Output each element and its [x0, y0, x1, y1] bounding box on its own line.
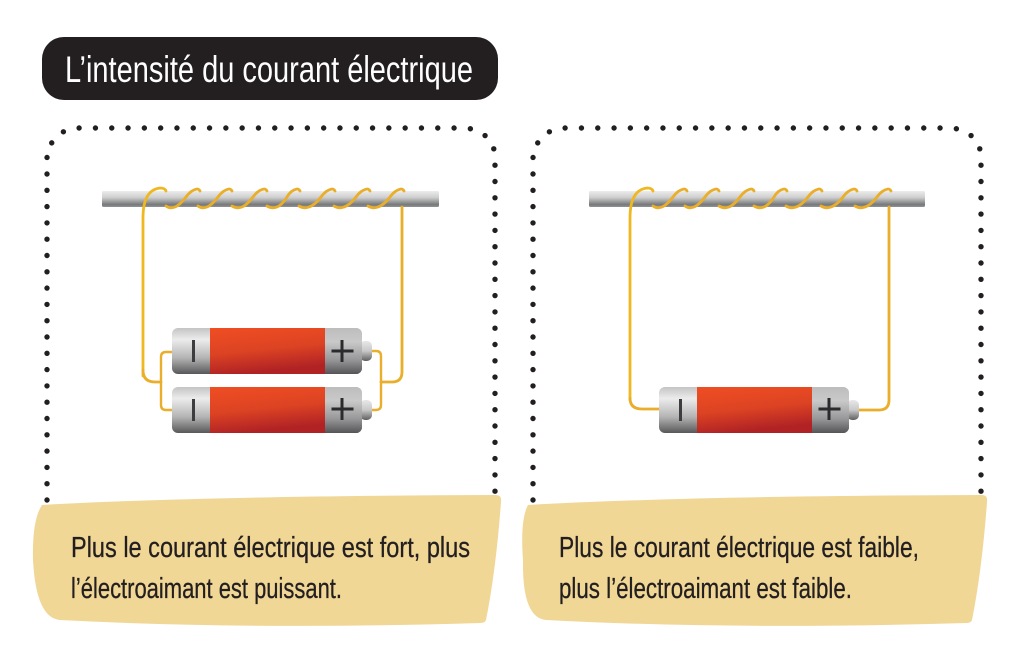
dotted frame — [47, 128, 495, 525]
panel: weak current — [522, 128, 987, 626]
copper coil and wires — [143, 188, 404, 410]
caption: weak current — [522, 495, 987, 626]
electromagnet rod — [589, 191, 925, 207]
copper coil and wires — [630, 188, 891, 410]
dotted frame — [533, 128, 981, 525]
title banner — [42, 37, 498, 100]
caption: weak current: plus l’électroaimant est faible. — [559, 573, 852, 605]
battery — [659, 387, 859, 433]
caption: strong current: l’électroaimant est puissant. — [71, 573, 342, 605]
title text: L’intensité du courant électrique — [65, 49, 473, 90]
battery 1 — [172, 328, 372, 374]
panel: strong current — [33, 128, 501, 626]
electromagnet rod — [102, 191, 439, 207]
caption: weak current: Plus le courant électrique est faible, — [559, 532, 919, 564]
caption: strong current: Plus le courant électrique est fort, plus — [71, 532, 470, 564]
battery 2 — [172, 387, 372, 433]
caption: strong current — [33, 495, 501, 626]
